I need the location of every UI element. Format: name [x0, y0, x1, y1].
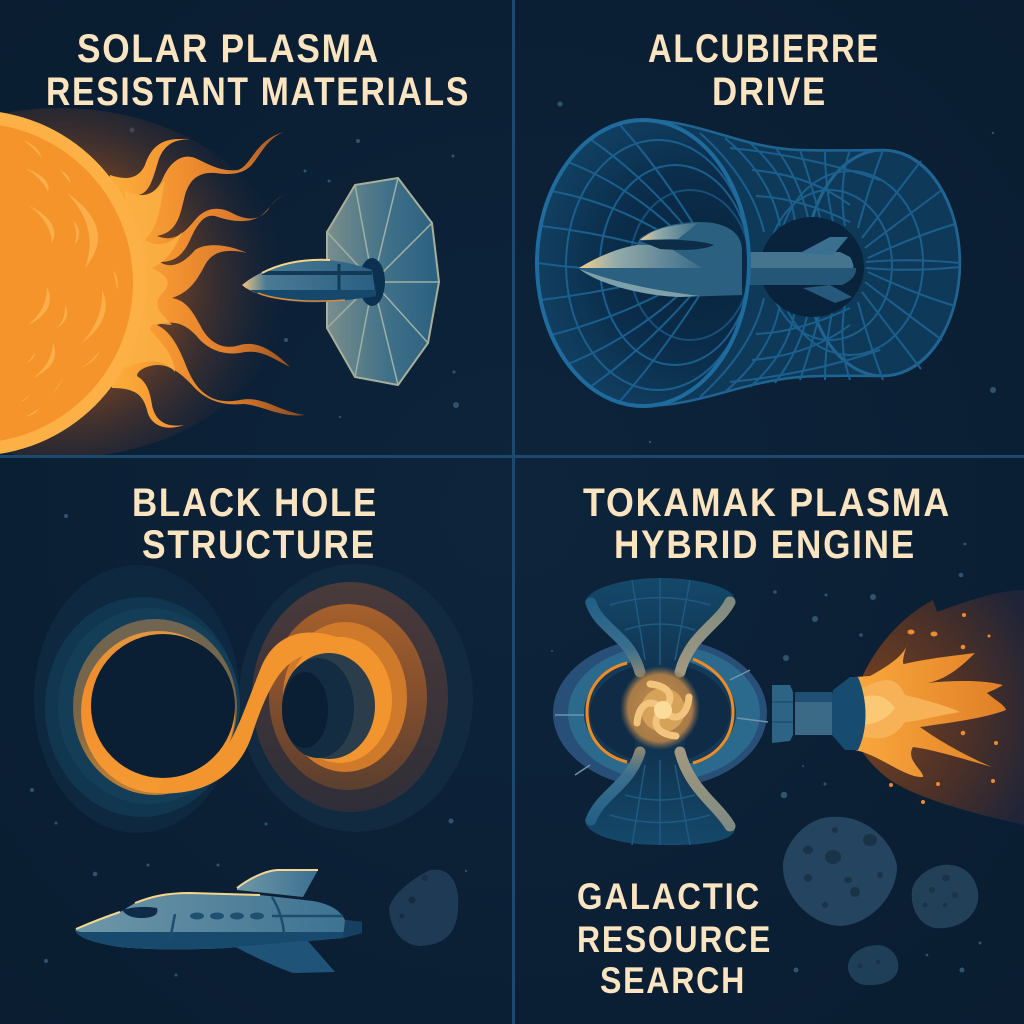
heading: galactic resource search — [577, 876, 772, 1001]
heading: tokamak plasma hybrid engine: TOKAMAK PLASMA — [583, 481, 951, 525]
warp tunnel wireframe — [537, 120, 960, 406]
heading: solar plasma: RESISTANT MATERIALS — [46, 70, 470, 114]
asteroid — [389, 870, 458, 946]
panel: black hole structure — [34, 481, 473, 973]
warp ring front rim — [537, 120, 749, 406]
right halo rings — [239, 564, 473, 832]
hourglass field coil — [585, 578, 735, 845]
heading: alcubierre drive: DRIVE — [712, 70, 827, 114]
heading: black hole structure: STRUCTURE — [142, 523, 376, 567]
spacecraft with solar shield — [242, 178, 439, 385]
heading: galactic resource search: RESOURCE — [577, 919, 772, 960]
black holes — [91, 634, 375, 778]
exhaust plume — [860, 590, 1024, 825]
panel: solar plasma resistant materials — [0, 27, 470, 458]
warp ship rear — [748, 237, 856, 303]
torus — [553, 638, 768, 788]
hub — [359, 258, 385, 306]
heading: galactic resource search: GALACTIC — [577, 876, 761, 917]
orange containment arcs — [587, 659, 733, 763]
flame — [851, 642, 1006, 777]
heading: tokamak plasma hybrid engine: HYBRID ENGINE — [614, 523, 916, 567]
panel: alcubierre drive — [537, 27, 960, 406]
warp ship front hull — [579, 222, 742, 297]
accretion band figure eight — [158, 632, 345, 793]
solar flares — [90, 132, 305, 428]
plasma core swirl — [620, 666, 700, 750]
heading: solar plasma: SOLAR PLASMA — [77, 27, 380, 71]
heading: galactic resource search: SEARCH — [600, 960, 746, 1001]
left halo rings — [34, 565, 240, 833]
engine nozzle — [772, 677, 866, 750]
sun — [0, 110, 146, 456]
embers — [889, 613, 998, 804]
shield dish — [327, 178, 439, 385]
heading: tokamak plasma hybrid engine — [583, 481, 951, 567]
asteroids — [783, 817, 897, 926]
bullet hull — [242, 260, 376, 302]
heading: black hole structure — [132, 481, 378, 567]
heading: alcubierre drive: ALCUBIERRE — [648, 27, 880, 71]
heading: solar plasma — [46, 27, 470, 114]
panel: tokamak plasma hybrid engine — [553, 481, 1024, 1001]
heading: black hole structure: BLACK HOLE — [132, 481, 378, 525]
heading: alcubierre drive — [648, 27, 880, 114]
spaceship — [75, 870, 362, 973]
sun glow — [6, 108, 263, 455]
